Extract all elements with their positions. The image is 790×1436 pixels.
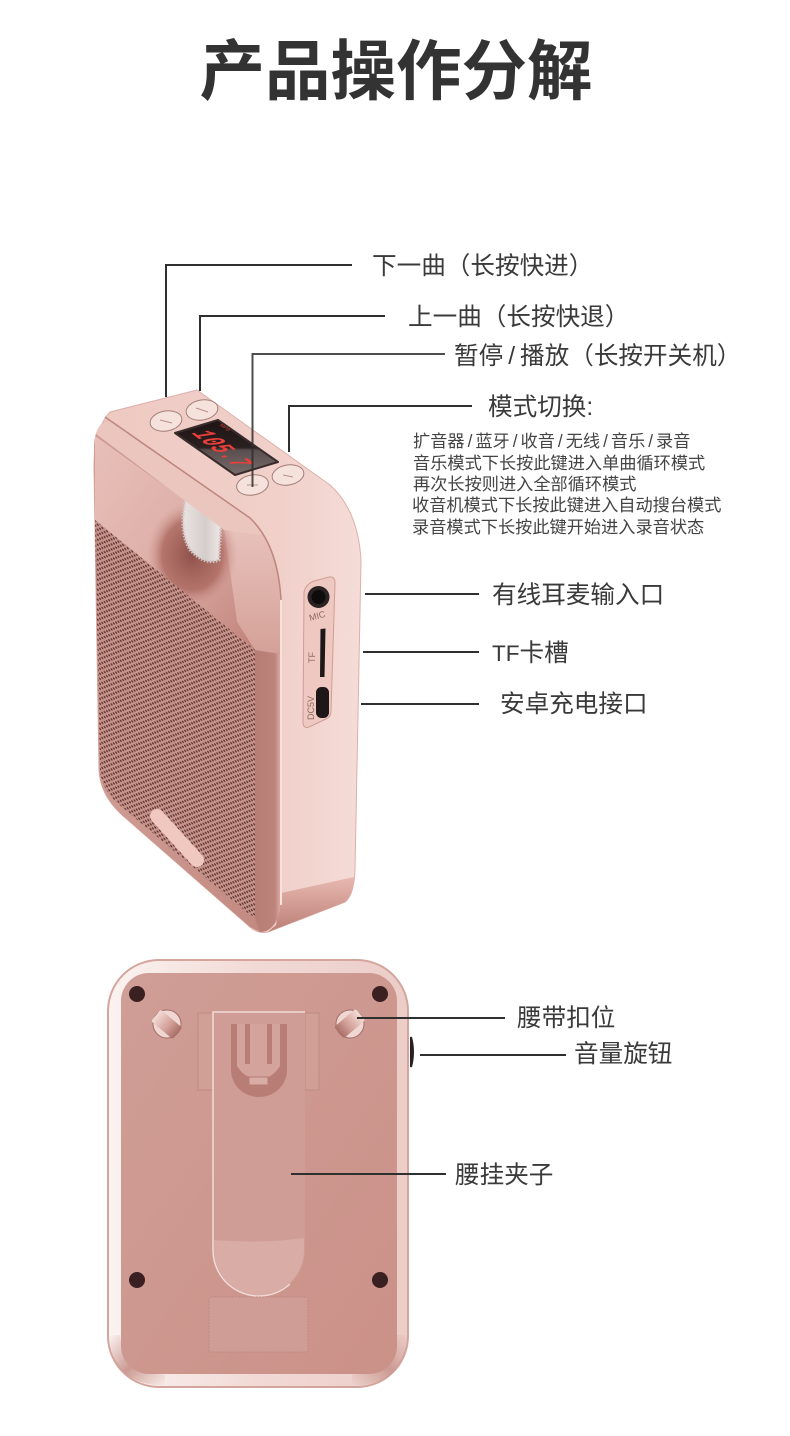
button: mode: [271, 462, 305, 488]
micro USB port: [316, 687, 329, 718]
callout: charging port: 安卓充电接口: [500, 690, 648, 718]
label recess: [209, 1297, 308, 1352]
back inner panel: [121, 973, 397, 1374]
TF label: TF: [307, 652, 317, 663]
shadow around volume knob: [146, 501, 238, 609]
screw holes: [129, 986, 388, 1288]
bevel lower-left corner shading: [115, 1335, 165, 1380]
mode description text: [412, 431, 721, 537]
MIC jack: [308, 586, 330, 608]
callout: wired headset input: 有线耳麦输入口: [492, 581, 664, 609]
callout: next track: 下一曲（长按快进）: [372, 252, 593, 280]
clip left bracket: [198, 1013, 213, 1090]
front face: [94, 420, 280, 932]
clip spring tongue: [237, 1024, 280, 1079]
clip glossy tip: [214, 1238, 304, 1295]
callout: waist clip: 腰挂夹子: [455, 1161, 553, 1189]
callout: next track: [166, 252, 593, 397]
frequency reading: 105.7: [181, 429, 260, 469]
button: next: [149, 408, 183, 434]
mode description text: 音乐模式下长按此键进入单曲循环模式: [413, 453, 705, 473]
title: 产品操作分解: [199, 35, 593, 108]
volume knob: [183, 497, 221, 562]
callout: previous track: [200, 303, 629, 391]
device body silhouette: [94, 390, 361, 932]
right belt knob: [330, 1004, 370, 1044]
mode description text: 录音模式下长按此键开始进入录音状态: [412, 517, 704, 537]
device: back view: [107, 959, 413, 1388]
callout: pause play: 暂停/播放（长按开关机）: [454, 342, 741, 370]
DC5V label: DC5V: [306, 696, 316, 720]
callout: TF slot: TF卡槽: [492, 639, 569, 667]
mode description text: 收音机模式下长按此键进入自动搜台模式: [412, 495, 721, 515]
clip U slot: [231, 1024, 287, 1097]
MIC label: MIC: [308, 609, 327, 623]
device: front view: [94, 390, 361, 932]
callout: belt buckle: 腰带扣位: [517, 1004, 615, 1032]
callout: mode switch: 模式切换:: [488, 393, 593, 421]
speaker grille: [95, 520, 255, 917]
clip right bracket: [305, 1013, 319, 1090]
upper side strip: [224, 505, 280, 654]
callout: volume knob: 音量旋钮: [574, 1040, 672, 1068]
upper bezel band: [96, 420, 262, 535]
port plate: [303, 577, 335, 727]
mode description text: 再次长按则进入全部循环模式: [413, 474, 636, 494]
front ridge line: [105, 417, 281, 600]
display status text: MP3: [217, 424, 231, 432]
bevel lower-right corner shading: [352, 1335, 402, 1380]
sound window recess: [95, 436, 255, 650]
TF card slot: [320, 628, 326, 677]
front edge highlight: [280, 600, 282, 905]
back bevel rim: [109, 961, 407, 1386]
back outer shell: [107, 959, 409, 1388]
side panel bottom edge: [268, 877, 354, 932]
volume wheel edge: [411, 1037, 413, 1067]
callout: pause play: [252, 342, 741, 487]
button: play pause: [235, 472, 270, 498]
mode description text: 扩音器/蓝牙/收音/无线/音乐/录音: [413, 431, 690, 451]
clip edge highlight: [213, 1012, 305, 1296]
belt clip: [213, 1012, 305, 1296]
lower side strip: [255, 650, 280, 932]
button: previous: [185, 397, 219, 423]
grip handle: [157, 816, 197, 860]
callout: mode switch: [289, 393, 593, 452]
callout: previous track: 上一曲（长按快退）: [408, 303, 629, 331]
left belt knob: [147, 1004, 187, 1044]
LED display: [175, 420, 278, 475]
